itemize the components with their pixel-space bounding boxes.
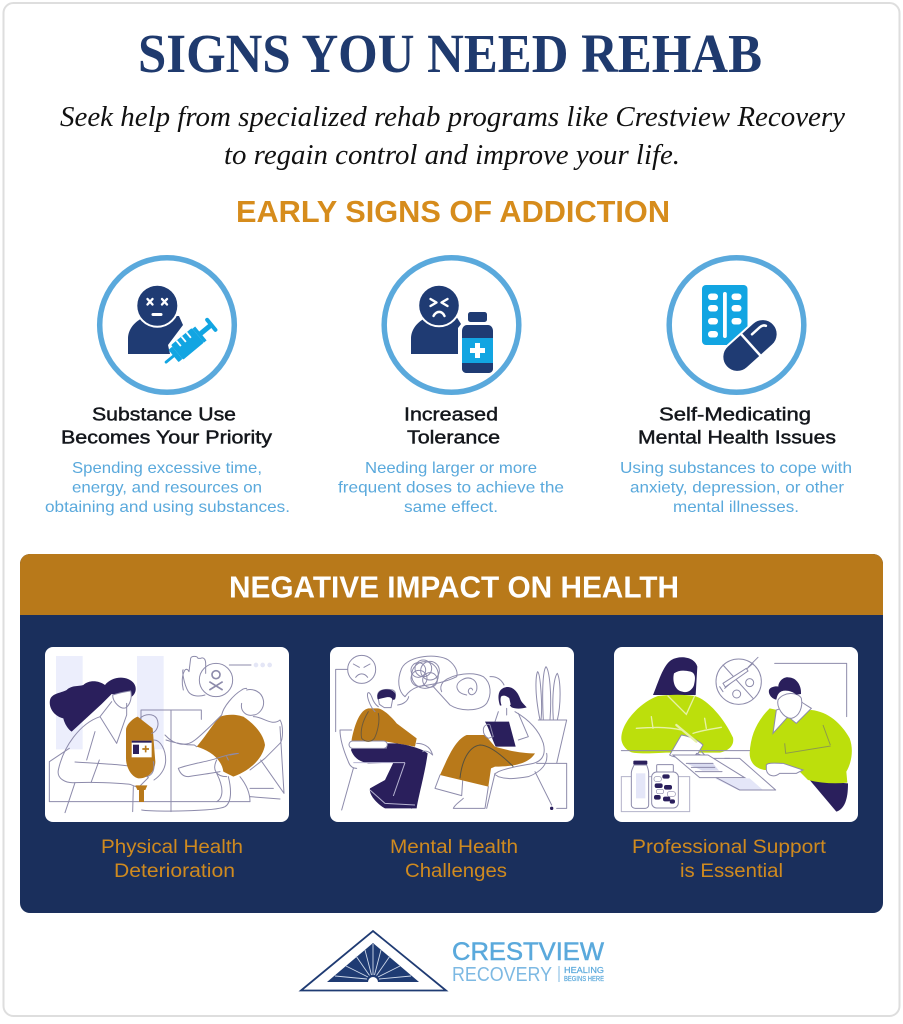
logo wordmark: RECOVERY	[452, 964, 552, 986]
illustration: physical health, nurse and patient	[45, 647, 289, 822]
panel: negative impact on health	[20, 554, 883, 913]
heading	[61, 404, 272, 448]
illustration: professional support, consultation	[614, 647, 858, 822]
caption	[101, 837, 243, 882]
description	[620, 460, 852, 516]
heading: negative impact on health: NEGATIVE IMPACT ON HEALTH	[229, 570, 679, 604]
subtitle: to regain control and improve your life.	[224, 139, 680, 171]
heading: Substance Use	[92, 404, 236, 424]
heading: Increased	[404, 404, 498, 424]
description: Using substances to cope with	[620, 460, 852, 477]
illustration: mental health, therapy session	[330, 647, 574, 822]
panel: increased tolerance sign	[338, 258, 564, 516]
subtitle	[60, 101, 845, 171]
icon: person with syringe	[100, 258, 234, 392]
description: energy, and resources on	[72, 480, 262, 496]
title: SIGNS YOU NEED REHAB	[138, 23, 762, 84]
logo: Crestview Recovery	[301, 931, 604, 990]
heading: Mental Health Issues	[638, 428, 836, 448]
logo wordmark	[452, 938, 604, 986]
caption: is Essential	[680, 861, 783, 882]
description	[338, 460, 564, 516]
heading	[404, 404, 500, 448]
heading: Tolerance	[407, 428, 500, 448]
description: anxiety, depression, or other	[630, 480, 845, 496]
icon: person with medicine bottle	[384, 258, 519, 392]
heading: Self-Medicating	[659, 404, 811, 424]
description: Spending excessive time,	[72, 460, 262, 477]
caption: Professional Support	[632, 837, 827, 858]
panel: self-medicating sign	[620, 258, 852, 516]
caption: Challenges	[405, 861, 507, 882]
description: frequent doses to achieve the	[338, 480, 564, 496]
description: obtaining and using substances.	[45, 499, 290, 516]
heading: Becomes Your Priority	[61, 428, 272, 448]
caption	[390, 837, 518, 882]
header band	[20, 554, 883, 615]
caption: Mental Health	[390, 837, 518, 858]
caption: Deterioration	[114, 861, 235, 882]
caption: Physical Health	[101, 837, 243, 858]
logo mark: roof with rays	[301, 931, 446, 990]
description: mental illnesses.	[673, 499, 799, 516]
description	[45, 460, 290, 516]
panel: substance use sign	[45, 258, 290, 516]
icon: blister pack and capsule	[669, 258, 804, 392]
logo wordmark: BEGINS HERE	[564, 976, 604, 983]
heading: early signs of addiction: EARLY SIGNS OF ADDICTION	[236, 194, 670, 229]
caption	[632, 837, 827, 882]
description: Needing larger or more	[365, 460, 537, 477]
heading	[638, 404, 836, 448]
logo wordmark: HEALING	[564, 965, 604, 975]
description: same effect.	[404, 499, 498, 516]
subtitle: Seek help from specialized rehab programs like Crestview Recovery	[60, 101, 845, 133]
logo wordmark: CRESTVIEW	[452, 938, 604, 966]
